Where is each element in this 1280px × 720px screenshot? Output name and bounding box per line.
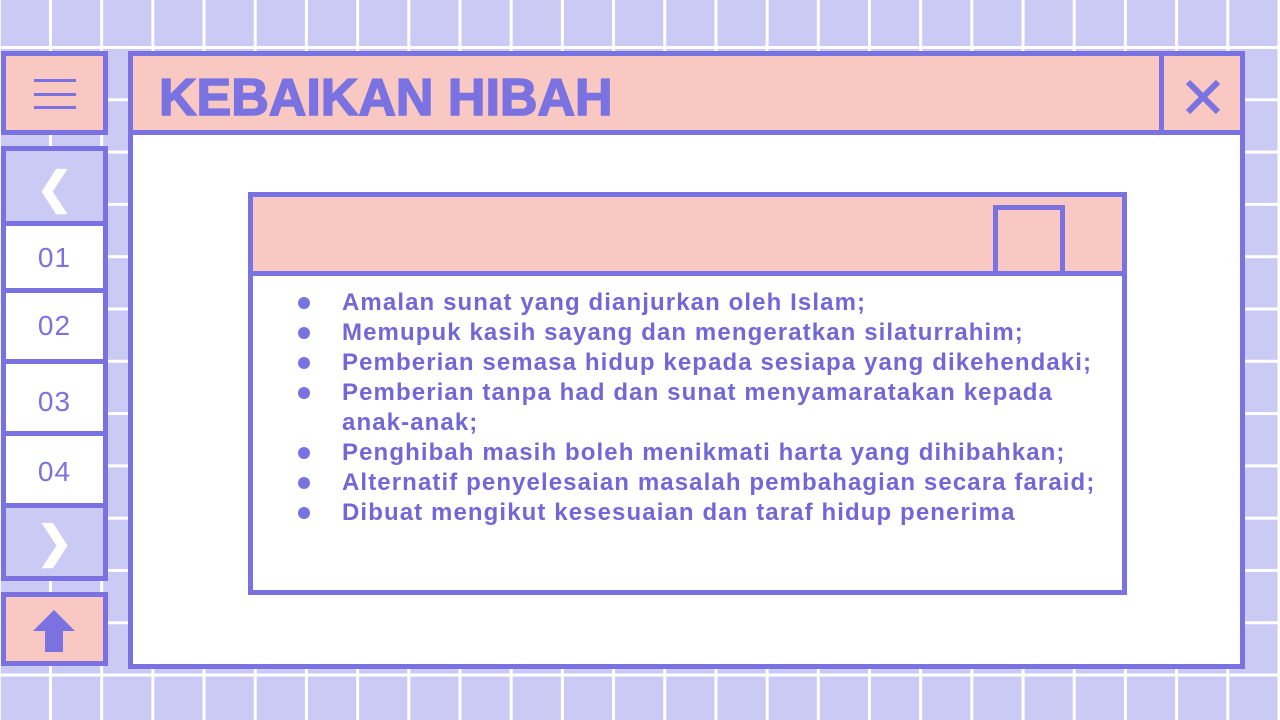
item 04: 04	[38, 456, 71, 487]
bullet list: Pemberian semasa hidup kepada sesiapa yang dikehendaki;	[342, 349, 1092, 376]
bullet list: Penghibah masih boleh menikmati harta yang dihibahkan;	[342, 439, 1066, 466]
bullet list: Alternatif penyelesaian masalah pembahagian secara faraid;	[342, 469, 1095, 496]
main window	[128, 51, 1245, 669]
bullet list: Amalan sunat yang dianjurkan oleh Islam;	[342, 289, 866, 316]
small square	[993, 205, 1065, 275]
item 02	[6, 293, 103, 364]
icon: right chevron: ❯	[36, 518, 73, 567]
header bar	[133, 56, 1240, 135]
bullet list: Memupuk kasih sayang dan mengeratkan silaturrahim;	[342, 319, 1024, 346]
title: KEBAIKAN HIBAH	[159, 69, 613, 127]
item 02: 02	[38, 310, 71, 341]
icon: up arrow	[33, 610, 75, 652]
icon: left chevron: ❮	[36, 164, 73, 213]
close button	[1159, 55, 1240, 130]
bullet list: Dibuat mengikut kesesuaian dan taraf hidup penerima	[342, 499, 1016, 526]
bullet list: Pemberian tanpa had dan sunat menyamaratakan kepada anak-anak;	[342, 379, 1053, 436]
panel header	[253, 197, 1122, 276]
item 03	[6, 364, 103, 436]
item 03: 03	[38, 386, 71, 417]
bullet list	[298, 289, 1095, 526]
inner panel	[248, 192, 1127, 595]
item 01: 01	[38, 242, 71, 273]
navigation column	[1, 146, 108, 581]
icon: hamburger	[34, 79, 76, 109]
menu button	[1, 51, 108, 135]
item 01	[6, 221, 103, 293]
item 04	[6, 436, 103, 508]
up button	[1, 592, 108, 666]
